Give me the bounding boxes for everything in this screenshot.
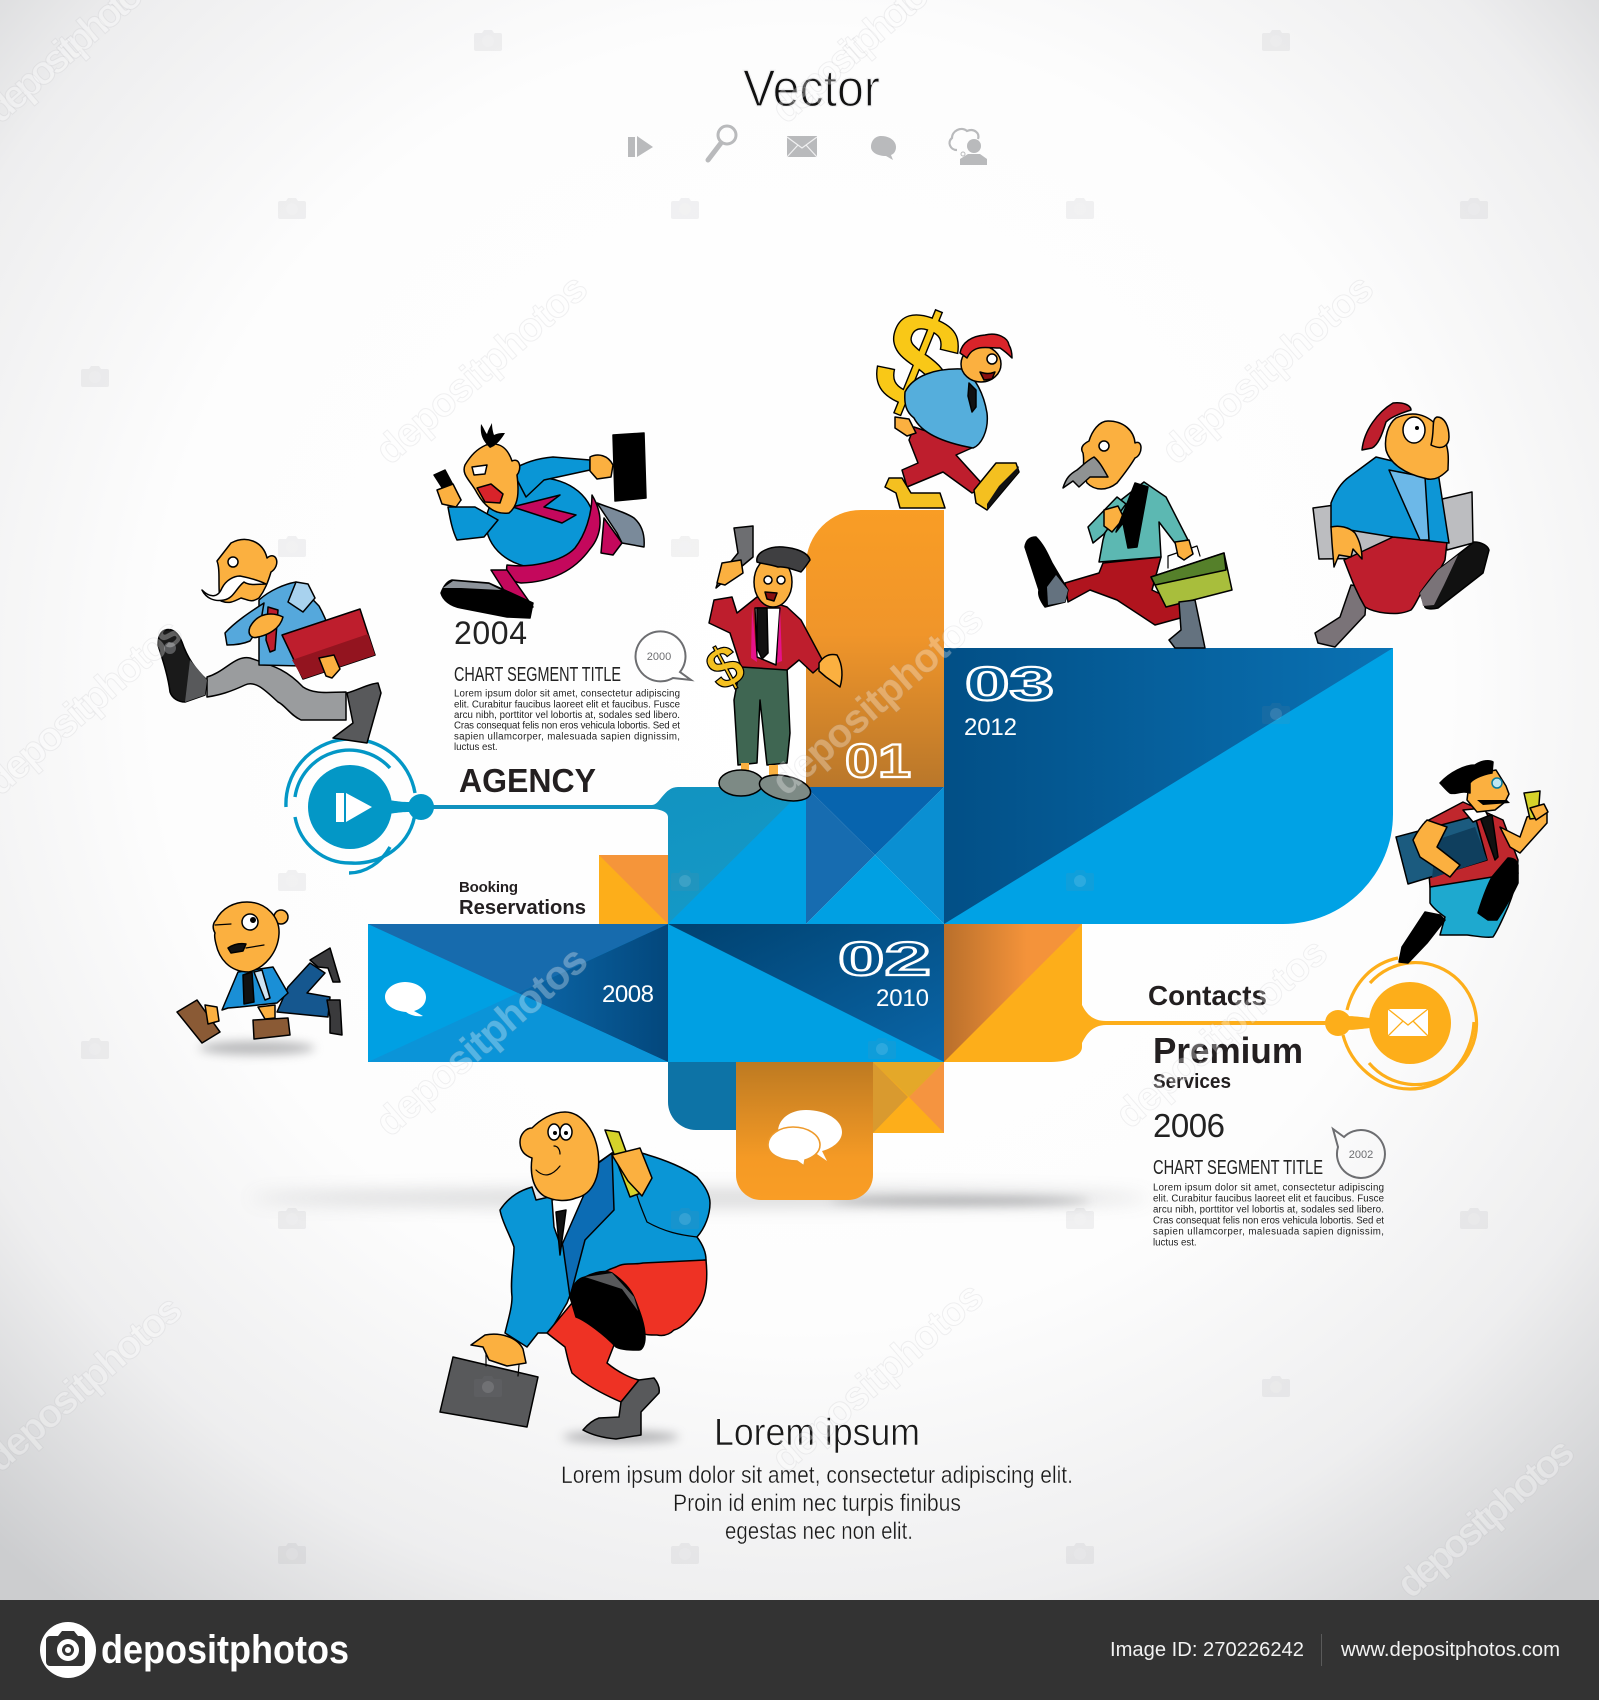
- panel 01: orange column: [806, 510, 944, 787]
- text block: 2006 chart segment: [1153, 1107, 1384, 1248]
- text block: 2006 chart segment: Cras consequat felis non eros vehicula lobortis. Sed et: [1153, 1215, 1384, 1226]
- panel 2008: [368, 924, 668, 1062]
- label 01: 01: [845, 734, 911, 787]
- character: old man with red case: [158, 539, 381, 743]
- panel: bottom small square: [873, 1062, 944, 1133]
- watermark: camera marks: [81, 30, 1488, 1564]
- panel: orange connector block: [944, 924, 1340, 1062]
- text block: 2004 chart segment: Cras consequat felis non eros vehicula lobortis. Sed et: [454, 721, 680, 732]
- footer bar: [0, 1600, 1599, 1700]
- text block: 2006 chart segment: Lorem ipsum dolor sit amet, consectetur adipiscing: [1153, 1182, 1384, 1194]
- character: angry fat man with black case: [434, 423, 646, 618]
- text block: 2004 chart segment: Lorem ipsum dolor sit amet, consectetur adipiscing: [454, 688, 680, 700]
- heading: Booking Reservations: Reservations: [459, 897, 586, 919]
- character: big man with phone and grey case: [440, 1112, 710, 1443]
- panel: teal connector block: [421, 787, 806, 924]
- watermark: repeated brand text: depositphotos: [1107, 930, 1336, 1137]
- icon: speech bubble: [871, 136, 896, 160]
- watermark: repeated brand text: depositphotos: [763, 1274, 992, 1481]
- icon: speech bubble: [385, 982, 426, 1016]
- logo mark: [40, 1622, 96, 1678]
- callout: 2002 bubble: [1333, 1129, 1385, 1178]
- text block: 2004 chart segment: arcu nibh, porttitor vel lobortis at, sodales sed libero.: [454, 710, 680, 721]
- character: running man with navy case: [1396, 761, 1548, 963]
- character: man carrying dollar sign: [855, 276, 1019, 510]
- heading: AGENCY: AGENCY: [459, 762, 596, 799]
- icon: envelope: [787, 136, 817, 157]
- year 2008: 2008: [602, 981, 654, 1008]
- floor shadow: [250, 1191, 1150, 1205]
- closing text: egestas nec non elit.: [725, 1518, 913, 1545]
- heading: Premium Services: Services: [1153, 1071, 1231, 1093]
- heading: Contacts: Contacts: [1148, 980, 1267, 1011]
- watermark: repeated brand text: depositphotos: [367, 938, 596, 1145]
- website: www.depositphotos.com: [1340, 1639, 1560, 1661]
- closing text: Lorem ipsum dolor sit amet, consectetur adipiscing elit.: [561, 1462, 1073, 1489]
- character: man with cap and grey sheets: [1313, 403, 1489, 647]
- heading: Booking Reservations: [459, 879, 586, 919]
- text block: 2004 chart segment: CHART SEGMENT TITLE: [454, 664, 621, 686]
- label 03: 03: [965, 657, 1054, 710]
- callout: 2000 bubble: [636, 631, 691, 681]
- year 2010: 2010: [876, 985, 929, 1012]
- watermark: repeated brand text: depositphotos: [763, 597, 992, 804]
- header title: Vector: [743, 60, 880, 118]
- icon: orange mail node: [1325, 958, 1477, 1089]
- icon: cloud person: [950, 129, 987, 165]
- panel 02: [668, 924, 944, 1062]
- icon: double speech bubbles: [768, 1110, 842, 1166]
- character: small winking man with two cases: [177, 902, 342, 1055]
- callout: 2002 bubble: 2002: [1349, 1149, 1373, 1161]
- panel: small orange square: [599, 855, 668, 924]
- text block: 2006 chart segment: sapien ullamcorper, malesuada sapien dignissim,: [1153, 1226, 1384, 1237]
- heading: Booking Reservations: Booking: [459, 879, 518, 896]
- watermark: repeated brand text: depositphotos: [1388, 1429, 1583, 1607]
- heading: Premium Services: Premium: [1153, 1030, 1303, 1071]
- text block: 2006 chart segment: arcu nibh, porttitor vel lobortis at, sodales sed libero.: [1153, 1204, 1384, 1215]
- panel: bottom orange tab: [736, 1062, 873, 1200]
- closing heading: Lorem ipsum: [714, 1412, 920, 1454]
- panel: centre X block: [806, 787, 944, 924]
- closing text: [561, 1462, 1073, 1545]
- dollar sign in pocket: $: [696, 631, 755, 704]
- callout: 2000 bubble: 2000: [647, 651, 671, 663]
- text block: 2004 chart segment: sapien ullamcorper, malesuada sapien dignissim,: [454, 731, 680, 742]
- icon: magnifier: [708, 126, 736, 160]
- text block: 2004 chart segment: 2004: [454, 615, 527, 651]
- character: man in red jacket: [696, 526, 842, 805]
- text block: 2006 chart segment: elit. Curabitur faucibus laoreet elit et faucibus. Fusce: [1153, 1193, 1384, 1204]
- icon: blue play node: [286, 739, 434, 873]
- header icon row: [628, 126, 987, 165]
- text block: 2004 chart segment: [454, 615, 680, 753]
- heading: Premium Services: [1153, 1030, 1303, 1093]
- logo wordmark: depositphotos: [101, 1628, 349, 1672]
- text block: 2004 chart segment: elit. Curabitur faucibus laoreet elit et faucibus. Fusce: [454, 699, 680, 710]
- year 2012: 2012: [964, 714, 1017, 741]
- closing text: Proin id enim nec turpis finibus: [673, 1490, 961, 1517]
- text block: 2006 chart segment: CHART SEGMENT TITLE: [1153, 1157, 1323, 1179]
- text block: 2006 chart segment: 2006: [1153, 1107, 1225, 1144]
- panel: bottom teal tab: [668, 1062, 736, 1130]
- text block: 2004 chart segment: luctus est.: [454, 742, 498, 753]
- dollar sign on back: $: [855, 276, 982, 446]
- text block: 2006 chart segment: luctus est.: [1153, 1237, 1197, 1248]
- chart: central stacked blocks: [368, 510, 1393, 1200]
- image id: Image ID: 270226242: [1110, 1639, 1304, 1661]
- watermark: repeated brand text: depositphotos: [367, 266, 596, 473]
- label 02: 02: [838, 932, 931, 985]
- watermark: repeated brand text: depositphotos: [1153, 266, 1382, 473]
- panel 03: large blue block: [944, 648, 1393, 924]
- icon: play: [628, 136, 653, 157]
- character: grey moustache man with green case: [1025, 421, 1232, 648]
